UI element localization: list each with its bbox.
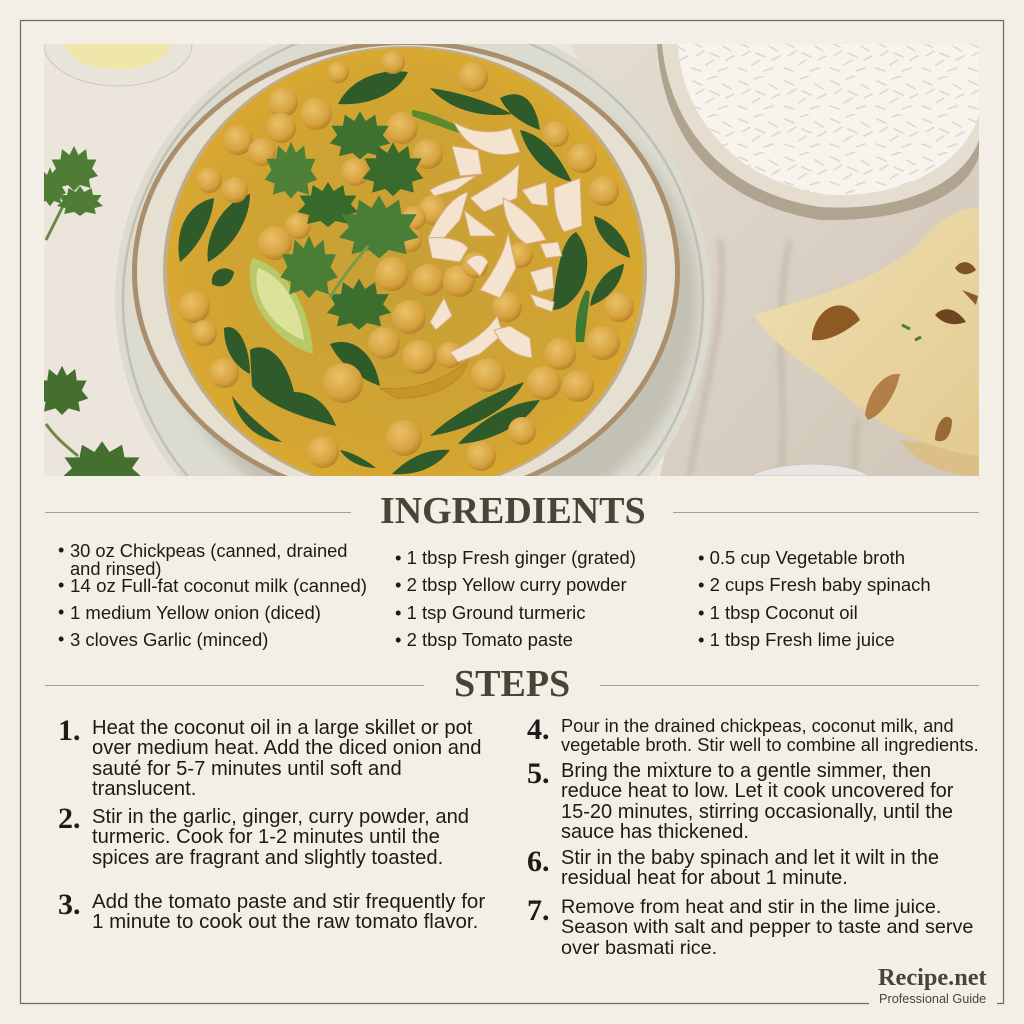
ingredients column 3: • 1 tbsp Fresh lime juice [698, 629, 895, 650]
ingredients column 1: 30 oz Chickpeas (canned, drained [70, 540, 347, 561]
ingredients column 2: • 2 tbsp Tomato paste [395, 629, 573, 650]
step 4: Pour in the drained chickpeas, coconut milk, and [561, 715, 954, 736]
step 3: Add the tomato paste and stir frequently for [92, 890, 485, 913]
brand mark [878, 964, 987, 1006]
step 6 [527, 845, 939, 889]
step 2 [58, 802, 469, 868]
ingredients column 2 [395, 547, 636, 650]
ingredients column 1: and rinsed) [70, 558, 161, 579]
food photo illustration [44, 44, 979, 476]
ingredients column 1: • [58, 540, 64, 560]
step 5: reduce heat to low. Let it cook uncovered for [561, 780, 953, 802]
toasted coconut flakes [428, 122, 582, 362]
brand mark: Recipe.net [878, 964, 987, 991]
ingredients column 2: • 2 tbsp Yellow curry powder [395, 574, 627, 595]
ingredients column 2: • 1 tbsp Fresh ginger (grated) [395, 547, 636, 568]
step 5: 5. [527, 757, 550, 790]
ingredients column 3: • 2 cups Fresh baby spinach [698, 574, 931, 595]
table background [44, 44, 979, 476]
ingredients column 3 [698, 547, 931, 650]
step 7: over basmati rice. [561, 936, 717, 958]
rice bowl [657, 44, 979, 220]
step 6: 6. [527, 845, 550, 878]
heading: ingredients: INGREDIENTS [380, 490, 646, 532]
step 6: Stir in the baby spinach and let it wilt in the [561, 847, 939, 869]
step 1: translucent. [92, 778, 196, 800]
step 7 [527, 894, 973, 958]
ingredients column 2: • 1 tsp Ground turmeric [395, 602, 586, 623]
step 3: 3. [58, 888, 80, 921]
step 2: Stir in the garlic, ginger, curry powder, and [92, 806, 469, 828]
step 5: 15-20 minutes, stirring occasionally, until the [561, 800, 953, 822]
cilantro sprigs on table [34, 146, 142, 495]
folded towel corner [750, 464, 870, 476]
step 1 [58, 714, 481, 800]
ingredients column 3: • 0.5 cup Vegetable broth [698, 547, 905, 568]
spinach leaves [178, 71, 630, 474]
linen cloth [570, 44, 979, 476]
step 3 [58, 888, 485, 933]
step 3: 1 minute to cook out the raw tomato flavor. [92, 910, 478, 933]
ingredients column 1: 3 cloves Garlic (minced) [70, 629, 268, 650]
chickpeas [178, 50, 634, 471]
ingredients column 1: • [58, 575, 64, 595]
step 1: over medium heat. Add the diced onion and [92, 737, 481, 759]
ingredients column 1: • [58, 629, 64, 649]
ingredients column 1: 1 medium Yellow onion (diced) [70, 602, 321, 623]
naan bread [755, 208, 979, 476]
step 4: vegetable broth. Stir well to combine all ingredients. [561, 734, 979, 755]
plate under bowl [115, 12, 711, 588]
cilantro garnish [265, 111, 423, 330]
ingredients column 1: 14 oz Full-fat coconut milk (canned) [70, 575, 367, 596]
brand mark: Professional Guide [879, 992, 986, 1006]
step 4 [527, 713, 979, 755]
step 7: 7. [527, 894, 550, 927]
heading: steps: STEPS [454, 663, 570, 705]
ingredients column 1 [58, 540, 367, 650]
step 5: Bring the mixture to a gentle simmer, then [561, 760, 931, 782]
ingredients column 1: • [58, 602, 64, 622]
step 1: sauté for 5-7 minutes until soft and [92, 758, 402, 780]
step 7: Remove from heat and stir in the lime juice. [561, 896, 941, 918]
step 7: Season with salt and pepper to taste and serve [561, 916, 973, 938]
step 2: 2. [58, 802, 80, 835]
small bowl of oil [44, 2, 192, 86]
step 1: 1. [58, 714, 80, 747]
step 2: turmeric. Cook for 1-2 minutes until the [92, 826, 440, 848]
step 6: residual heat for about 1 minute. [561, 867, 848, 889]
lime wedge [250, 258, 313, 354]
step 5: sauce has thickened. [561, 821, 749, 843]
step 4: 4. [527, 713, 550, 746]
step 5 [527, 757, 954, 843]
curry bowl [132, 40, 680, 504]
step 2: spices are fragrant and slightly toasted. [92, 846, 443, 868]
step 1: Heat the coconut oil in a large skillet or pot [92, 717, 472, 739]
olive oil swirl [380, 360, 468, 398]
ingredients column 3: • 1 tbsp Coconut oil [698, 602, 858, 623]
